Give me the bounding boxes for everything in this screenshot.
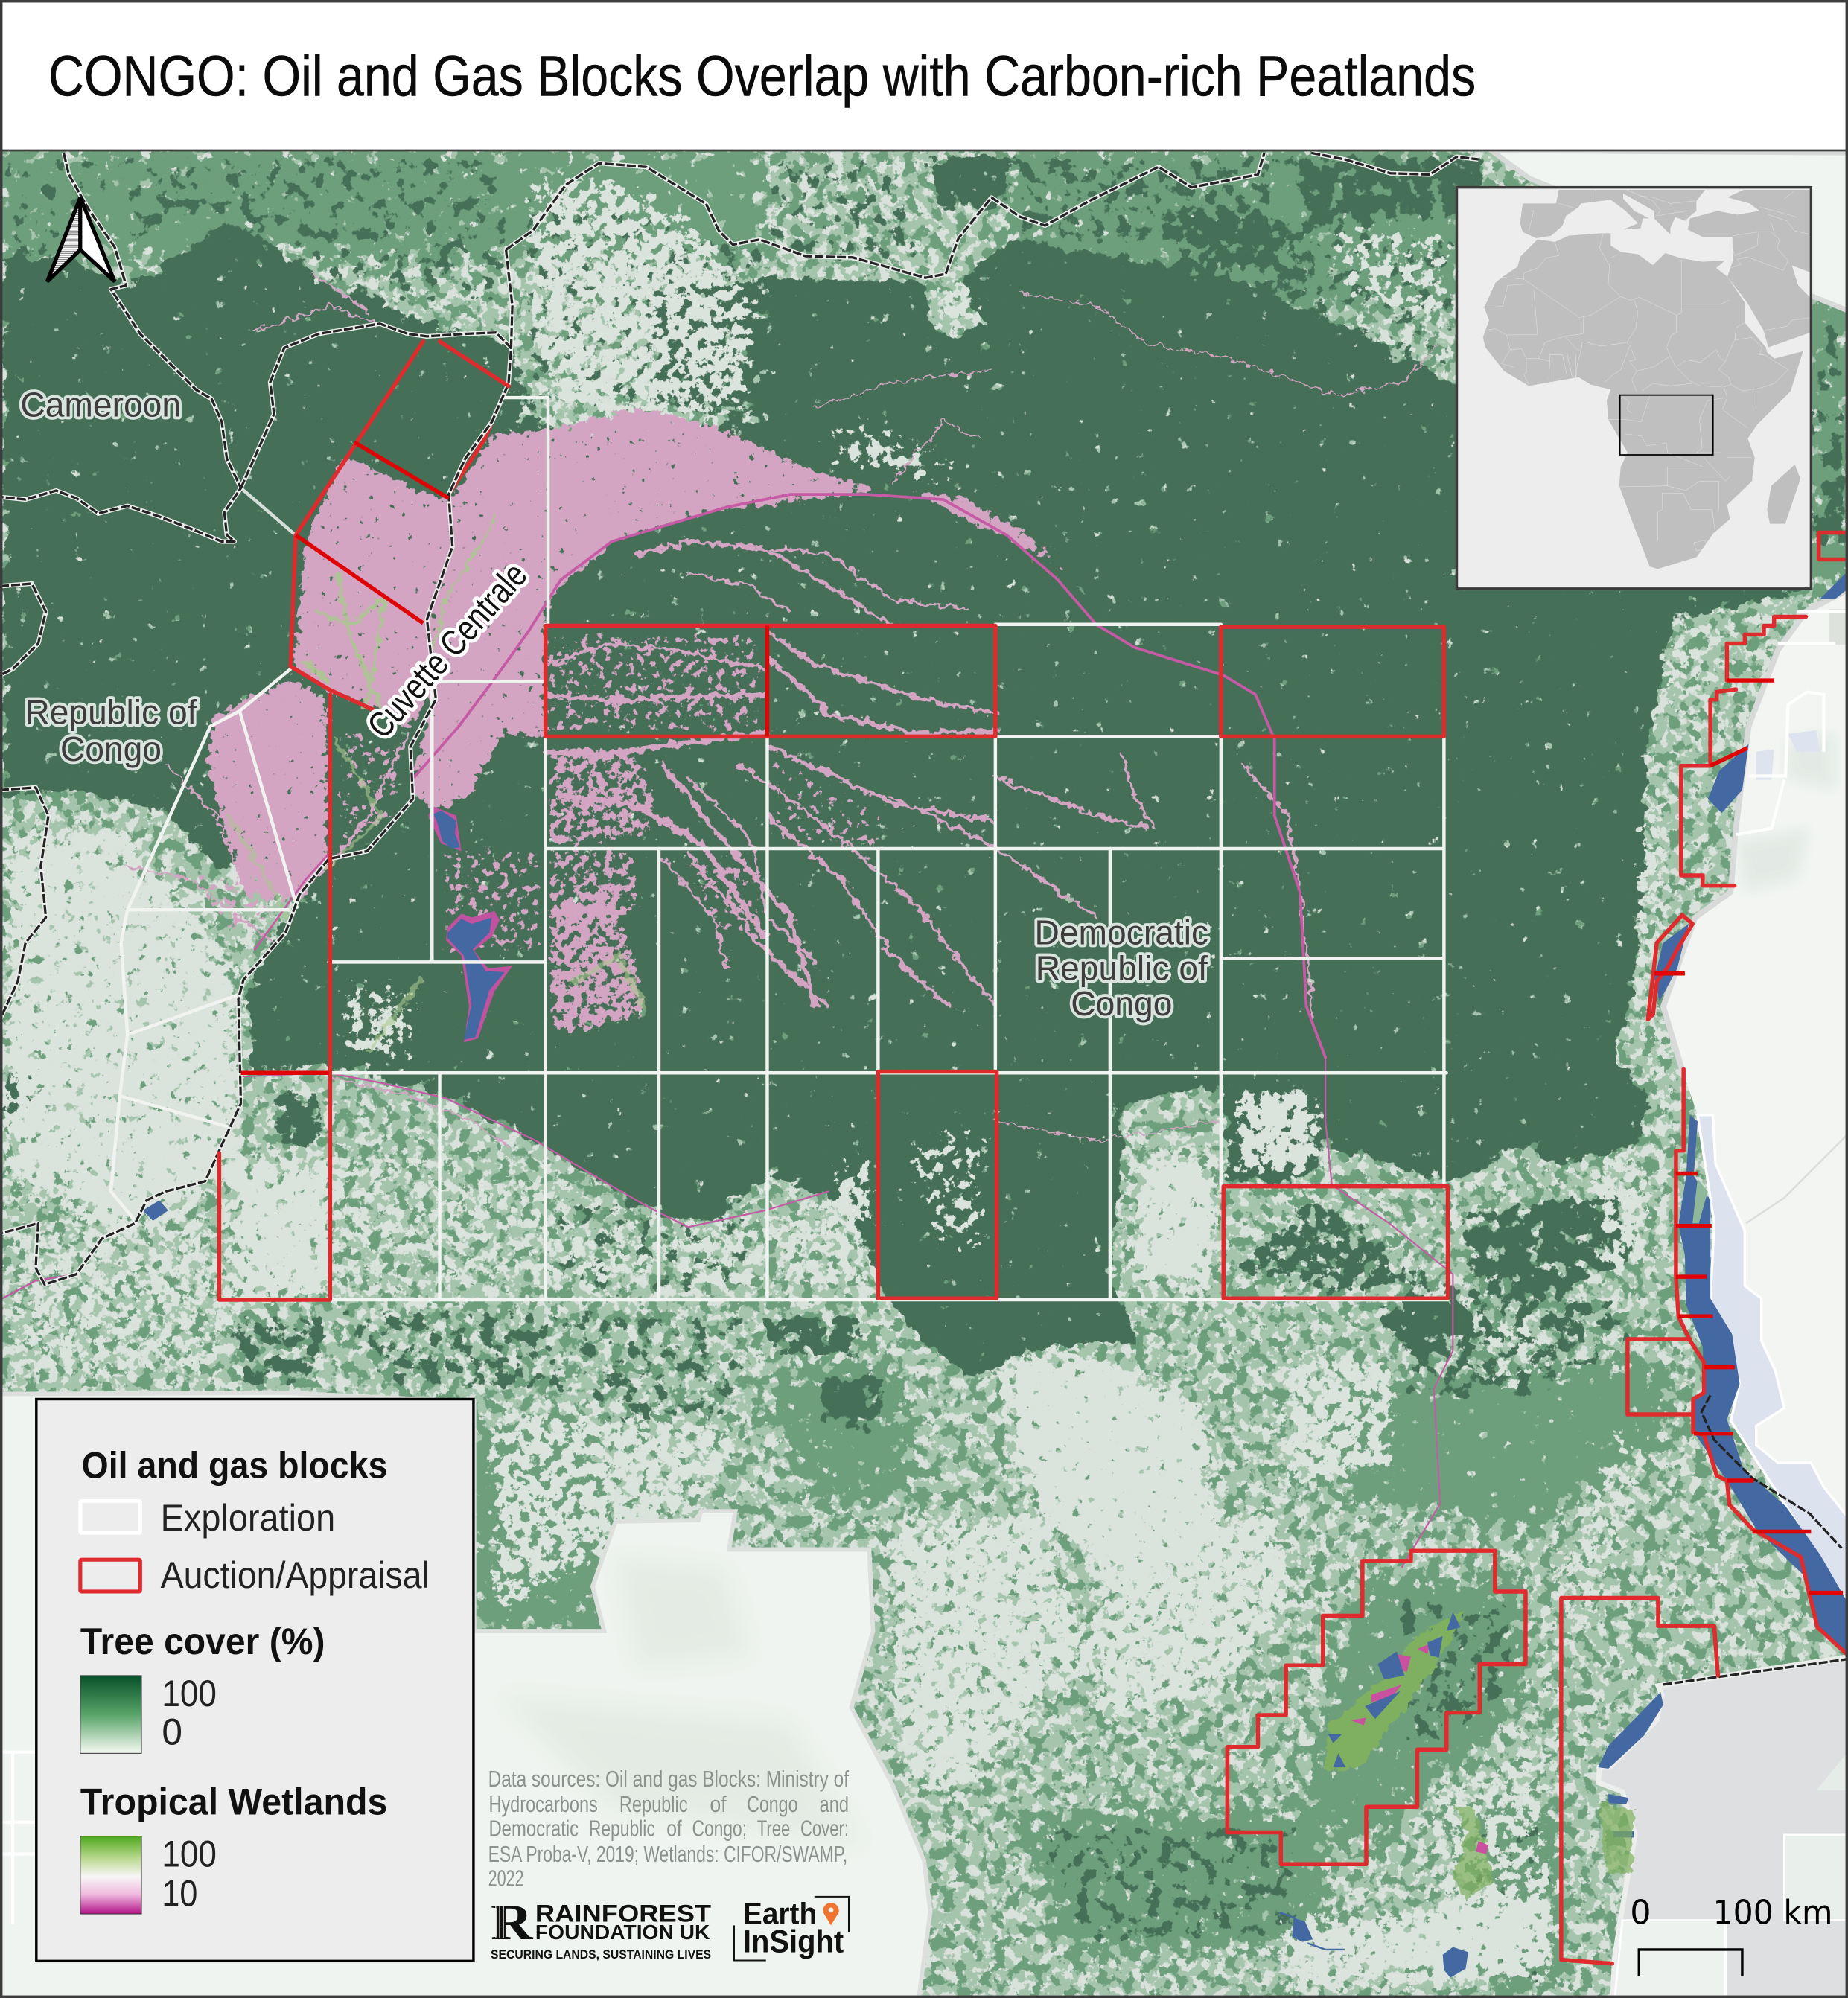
scale bar: 0 [1630, 1895, 1651, 1932]
legend panel [36, 1399, 474, 1961]
country label: Cameroon: Cameroon [20, 386, 181, 424]
auction block edge along the border [219, 395, 503, 1151]
legend heading: tree cover: Tree cover (%) [80, 1621, 325, 1662]
tree cover high label: 100 [162, 1673, 217, 1714]
data sources: Congo [747, 1791, 798, 1817]
data sources: 2022 [488, 1865, 524, 1891]
logo: Rainforest Foundation UK: R [491, 1894, 534, 1950]
border lines [0, 153, 1848, 1686]
peat fingers [127, 274, 1657, 1147]
Africa [1483, 233, 1803, 569]
data sources: Tree [757, 1816, 790, 1842]
data sources [488, 1766, 849, 1891]
logo: Rainforest Foundation UK [491, 1894, 711, 1962]
legend swatch: exploration [80, 1501, 140, 1533]
lakes [143, 571, 1848, 1978]
Madagascar [1767, 465, 1800, 524]
logo: Rainforest Foundation UK: SECURING LANDS, SUSTAINING LIVES [491, 1948, 711, 1962]
rivers [0, 494, 1453, 1567]
logo: Earth InSight: InSight [743, 1924, 844, 1959]
country label: Democratic Republic of Congo: Democratic [1034, 913, 1208, 951]
icon: north arrow [47, 197, 115, 281]
inset locator map [1457, 188, 1812, 589]
locator rectangle [1620, 395, 1713, 455]
Angola block outlines at left edge [0, 1752, 36, 1924]
logo: Rainforest Foundation UK: RAINFOREST [535, 1900, 711, 1927]
data sources: Republic [619, 1791, 687, 1817]
country label: Democratic Republic of Congo: Republic of [1036, 948, 1208, 987]
legend heading: tropical wetlands: Tropical Wetlands [80, 1781, 387, 1823]
wetlands high label: 100 [162, 1833, 217, 1875]
legend label: exploration: Exploration [161, 1497, 335, 1539]
Asia [1688, 190, 1811, 348]
country label: Democratic Republic of Congo: Congo [1071, 984, 1172, 1023]
country label: Republic of Congo: Republic of [25, 692, 197, 731]
Persian Gulf [1792, 266, 1812, 299]
wetland green strips [229, 516, 643, 1051]
data sources: of [666, 1816, 682, 1842]
Zambia grey territory [1599, 1656, 1848, 1998]
data sources: Republic [589, 1816, 655, 1842]
peatlands: Cuvette Centrale [191, 405, 1096, 1038]
title: CONGO: Oil and Gas Blocks Overlap with Carbon-rich Peatlands [48, 44, 1476, 108]
legend swatch: auction or appraisal [80, 1560, 140, 1592]
data sources: Hydrocarbons [488, 1791, 598, 1817]
data sources: and [820, 1791, 849, 1817]
label: Cuvette Centrale: Cuvette Centrale [360, 555, 535, 746]
logo: Earth InSight [734, 1897, 849, 1960]
scale bar: 100 km [1713, 1895, 1832, 1932]
legend heading: oil and gas blocks: Oil and gas blocks [82, 1445, 387, 1487]
country label: Republic of Congo: Congo [60, 730, 162, 768]
tree cover low label: 0 [162, 1711, 182, 1752]
tree cover gradient [80, 1676, 141, 1753]
data sources: ESA Proba-V, 2019; Wetlands: CIFOR/SWAMP, [488, 1841, 847, 1867]
data sources: Congo; [692, 1816, 747, 1842]
wetlands gradient [80, 1836, 141, 1914]
logo: Earth InSight: Earth [743, 1897, 817, 1931]
title band [0, 0, 1848, 150]
south-west pale territory (Angola) [0, 1393, 931, 1998]
auction and appraisal blocks [219, 342, 1848, 1964]
data sources: Democratic [488, 1816, 579, 1842]
logo: Rainforest Foundation UK: FOUNDATION UK [535, 1921, 710, 1944]
east pale territory [1491, 150, 1848, 1603]
data sources: of [710, 1791, 727, 1817]
scale bar [1630, 1895, 1832, 1976]
Upemba wetlands [1325, 1612, 1634, 1898]
Lake Tanganyika Tanzanian side [1698, 1115, 1848, 1603]
Europe [1520, 190, 1705, 238]
data sources: Cover: [800, 1816, 849, 1842]
legend label: auction or appraisal: Auction/Appraisal [161, 1554, 430, 1596]
wetlands low label: 10 [162, 1873, 197, 1915]
data sources: Data sources: Oil and gas Blocks: Ministry of [488, 1766, 849, 1792]
exploration blocks [111, 398, 1448, 1300]
